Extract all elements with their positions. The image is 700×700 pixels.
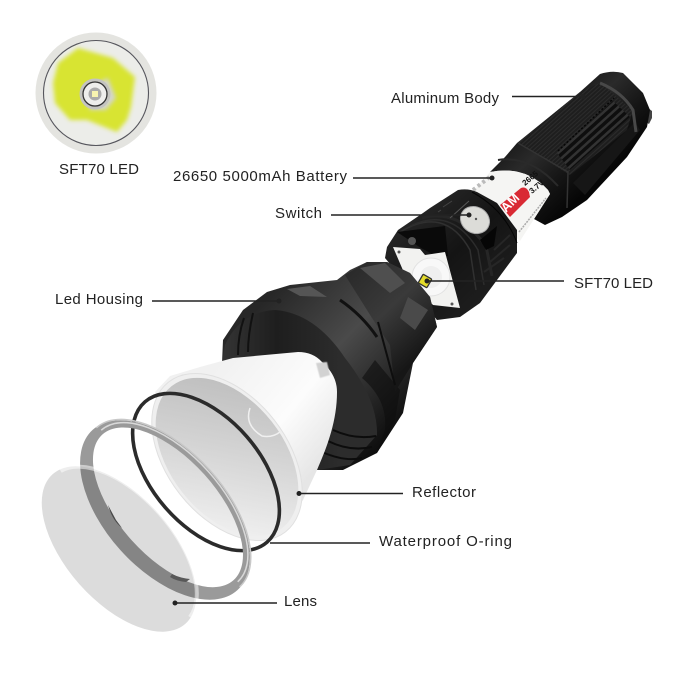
callout: reflector: Reflector [412,484,476,501]
reflector [121,345,337,569]
icon: switch button [456,201,494,239]
callout: aluminum body: Aluminum Body [391,90,500,107]
callout: SFT70 LED [424,275,653,292]
callout: lens [172,593,317,610]
callout: aluminum body [391,90,586,107]
housing rim highlights [287,286,327,297]
callout: LED housing [55,291,282,308]
callout: switch: Switch [275,205,322,222]
ribbed grip section [557,101,630,170]
callout: lens: Lens [284,593,317,610]
metal bezel ring [48,390,282,630]
icon: LED chip [418,274,432,288]
flashlight: battery [470,169,550,241]
flashlight: switch ring and threads [385,189,517,320]
icon: SFT70 LED front view [36,32,156,154]
callout: SFT70 LED: SFT70 LED [574,275,653,292]
flashlight: LED board [393,226,460,308]
housing neck and faceted bezel [345,262,437,392]
waterproof O-ring [104,366,308,578]
flashlight: LED housing [222,262,437,470]
callout: switch [275,205,472,222]
callout: LED housing: Led Housing [55,291,143,308]
callout: reflector [296,484,476,501]
callout: waterproof O-ring: Waterproof O-ring [379,533,512,550]
flashlight: battery: 3.7V [528,178,546,196]
knurled grip [518,83,633,175]
flashlight: battery: AM [498,190,522,215]
housing inner cavity [222,310,377,470]
flashlight: aluminum body [490,72,652,225]
callout: battery: 26650 5000mAh Battery [173,168,348,185]
callout: battery [173,168,494,185]
lens [13,438,226,659]
flashlight: battery: 2665 [521,169,540,188]
title: SFT70 LED caption: SFT70 LED [59,161,139,178]
